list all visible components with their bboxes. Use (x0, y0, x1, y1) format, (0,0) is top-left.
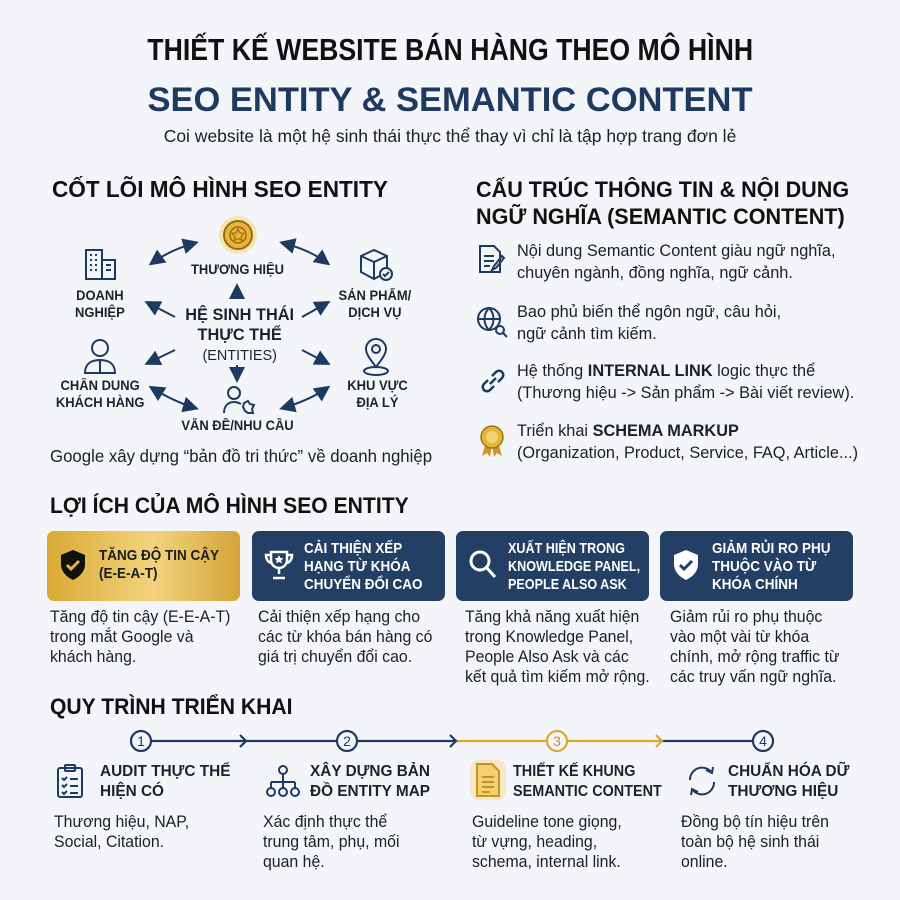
text: internal link: (Thương hiệu -> Sản phẩm -> Bài viết review). (517, 383, 854, 402)
list: semantic items (477, 245, 508, 457)
label: center ecosystem: HỆ SINH THÁI (186, 305, 294, 324)
icon: document gold (470, 760, 506, 800)
step 3 title (513, 762, 678, 802)
step 1 title: AUDIT THỰC THỂ (100, 763, 230, 780)
step 2 title: XÂY DỰNG BẢN (310, 763, 430, 780)
text: benefit 2 (258, 608, 432, 666)
icon: brand badge (219, 216, 257, 254)
text: benefit 2: giá trị chuyển đổi cao. (258, 648, 412, 666)
step 2 description: trung tâm, phụ, mối (263, 833, 399, 851)
step 4 title: THƯƠNG HIỆU (728, 783, 838, 800)
card: trust: (E-E-A-T) (99, 565, 157, 582)
text: language variants (517, 302, 781, 343)
step 3 description: Guideline tone giọng, (472, 813, 622, 831)
text: internal link: Hệ thống INTERNAL LINK logic thực thể (517, 361, 815, 380)
icon: globe search (477, 307, 508, 338)
arrows (144, 238, 330, 412)
label: geographic area: ĐỊA LÝ (356, 395, 398, 410)
text: benefit 1 (50, 608, 230, 666)
card: knowledge panel: KNOWLEDGE PANEL, (508, 558, 640, 575)
text: benefit 2: Cải thiện xếp hạng cho (258, 608, 420, 626)
text: benefit 4: các truy vấn ngữ nghĩa. (670, 668, 836, 686)
text: benefit 4: chính, mở rộng traffic từ (670, 648, 839, 666)
heading: semantic content: NGỮ NGHĨA (SEMANTIC CONTENT) (476, 204, 845, 229)
card: knowledge panel: PEOPLE ALSO ASK (508, 576, 627, 593)
card: reduce risk: GIẢM RỦI RO PHỤ (712, 540, 831, 557)
panel: entity diagram (56, 216, 412, 433)
icon: sync (684, 764, 720, 798)
caption: knowledge map: Google xây dựng “bản đồ tri thức” về doanh nghiệp (50, 446, 432, 466)
step 4 title (728, 762, 854, 802)
text: benefit 1: khách hàng. (50, 648, 136, 666)
label: business: DOANH (76, 288, 124, 303)
text: benefit 1: trong mắt Google và (50, 628, 194, 646)
label: product/service: DỊCH VỤ (348, 305, 402, 320)
card: trust: TĂNG ĐỘ TIN CẬY (99, 547, 219, 564)
card: reduce risk (660, 531, 853, 601)
icon: checklist (57, 764, 83, 798)
icon: product box (360, 248, 393, 281)
text: semantic content: Nội dung Semantic Content giàu ngữ nghĩa, (517, 241, 835, 260)
step 3 title: SEMANTIC CONTENT (513, 783, 662, 800)
label: geographic area: KHU VỰC (347, 378, 408, 393)
text: internal link (517, 361, 854, 402)
card: trust (47, 531, 240, 601)
title: THIẾT KẾ WEBSITE BÁN HÀNG THEO MÔ HÌNH (147, 32, 753, 67)
tagline: Coi website là một hệ sinh thái thực thể thay vì chỉ là tập hợp trang đơn lẻ (164, 126, 736, 146)
icon: gold medal (480, 425, 504, 457)
step 3 description (472, 812, 628, 872)
step 1 description: Thương hiệu, NAP, (54, 813, 189, 831)
step 4 description: Đồng bộ tín hiệu trên (681, 813, 829, 831)
label: business: NGHIỆP (75, 305, 125, 320)
step 2 title (310, 762, 435, 802)
step 3 title: THIẾT KẾ KHUNG (513, 763, 635, 780)
step 3 description: từ vựng, heading, (472, 833, 597, 851)
step 2 description (263, 812, 405, 872)
heading: semantic content (476, 177, 849, 229)
icon: building (85, 249, 116, 280)
step 2 title: ĐỒ ENTITY MAP (310, 783, 430, 800)
card: reduce risk: THUỘC VÀO TỪ (712, 558, 816, 575)
text: benefit 3: Tăng khả năng xuất hiện (465, 608, 639, 626)
text: semantic content: chuyên ngành, đồng nghĩa, ngữ cảnh. (517, 263, 793, 282)
text: benefit 3: People Also Ask và các (465, 648, 629, 666)
timeline: 4 (759, 733, 767, 749)
icon: hierarchy (266, 765, 300, 797)
card: reduce risk: KHÓA CHÍNH (712, 576, 798, 593)
icon: person (84, 339, 116, 374)
card: ranking: CẢI THIỆN XẾP (304, 540, 402, 557)
label: customer persona: CHÂN DUNG (60, 378, 140, 393)
card: knowledge panel (456, 531, 649, 601)
label: center ecosystem: (ENTITIES) (203, 347, 277, 364)
text: benefit 3: trong Knowledge Panel, (465, 628, 633, 646)
text: benefit 4: Giảm rủi ro phụ thuộc (670, 608, 822, 626)
text: semantic content (517, 241, 835, 282)
text: benefit 3: kết quả tìm kiếm mở rộng. (465, 668, 650, 686)
step 1 title (100, 762, 230, 800)
icon: document edit (479, 245, 506, 273)
timeline: 3 (553, 733, 561, 749)
icon: problem/need (223, 386, 256, 414)
label: customer persona: KHÁCH HÀNG (56, 395, 144, 410)
text: schema markup (517, 421, 858, 462)
step 1 description: Social, Citation. (54, 833, 164, 851)
label: brand: THƯƠNG HIỆU (190, 262, 284, 277)
card: ranking: CHUYỂN ĐỔI CAO (304, 576, 423, 593)
text: benefit 3 (465, 608, 650, 686)
step 4 description (681, 812, 835, 872)
text: schema markup: (Organization, Product, Service, FAQ, Article...) (517, 443, 858, 462)
timeline (130, 730, 774, 752)
step 4 description: online. (681, 853, 728, 871)
icon: location pin (363, 338, 389, 376)
text: schema markup: Triển khai SCHEMA MARKUP (517, 421, 739, 440)
subtitle heading: SEO ENTITY & SEMANTIC CONTENT (147, 81, 753, 119)
label: center ecosystem: THỰC THỂ (198, 325, 282, 344)
icon: link (482, 370, 504, 392)
label: center ecosystem (186, 305, 294, 364)
text: language variants: ngữ cảnh tìm kiếm. (517, 324, 657, 343)
text: language variants: Bao phủ biến thể ngôn ngữ, câu hỏi, (517, 302, 781, 321)
label: business (75, 288, 125, 320)
step 1 description (54, 812, 195, 852)
text: benefit 1: Tăng độ tin cậy (E-E-A-T) (50, 608, 230, 626)
label: geographic area (347, 378, 408, 410)
heading: process: QUY TRÌNH TRIỂN KHAI (50, 694, 293, 719)
timeline: 1 (137, 733, 145, 749)
text: benefit 4: vào một vài từ khóa (670, 628, 809, 646)
text: benefit 2: các từ khóa bán hàng có (258, 628, 432, 646)
step 1 title: HIỆN CÓ (100, 783, 164, 800)
label: product/service: SẢN PHẨM/ (339, 288, 411, 303)
heading: core model: CỐT LÕI MÔ HÌNH SEO ENTITY (52, 176, 388, 202)
step 4 description: toàn bộ hệ sinh thái (681, 833, 819, 851)
timeline: 2 (343, 733, 351, 749)
text: benefit 4 (670, 608, 839, 686)
step 3 description: schema, internal link. (472, 853, 621, 871)
card: knowledge panel: XUẤT HIỆN TRONG (508, 540, 625, 557)
label: problem/need: VẤN ĐỀ/NHU CẦU (181, 418, 294, 433)
heading: semantic content: CẤU TRÚC THÔNG TIN & NỘI DUNG (476, 177, 849, 202)
label: product/service (338, 288, 412, 320)
step 2 description: Xác định thực thể (263, 813, 387, 831)
card: ranking: HẠNG TỪ KHÓA (304, 558, 410, 575)
step 4 title: CHUẨN HÓA DỮ (728, 763, 849, 780)
heading: benefits: LỢI ÍCH CỦA MÔ HÌNH SEO ENTITY (50, 493, 409, 518)
step 2 description: quan hệ. (263, 853, 325, 871)
card: ranking (252, 531, 445, 601)
label: customer persona (56, 378, 144, 410)
